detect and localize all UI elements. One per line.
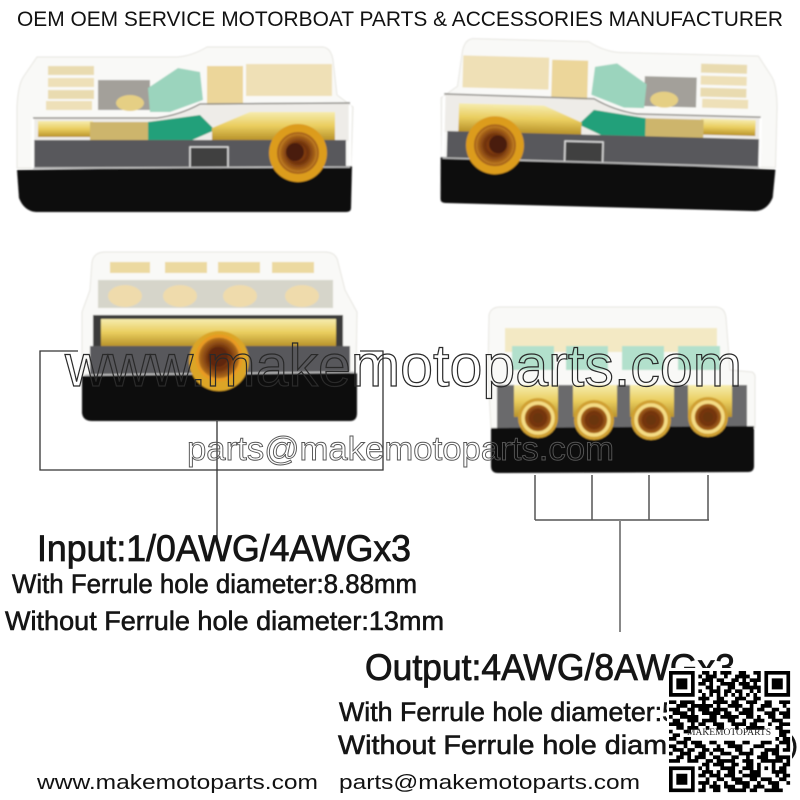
title: OEM OEM SERVICE MOTORBOAT PARTS & ACCESSORIES MANUFACTURER: [17, 7, 783, 31]
QR code: [667, 668, 792, 794]
product photo: fuse block, left-side view: [438, 38, 779, 212]
footer email: parts@makemotoparts.com: [339, 771, 640, 794]
QR centre label: MAKEMOTOPARTS: [687, 728, 771, 738]
output specification: Output:4AWG/8AWGx3: [365, 647, 735, 688]
product photo: output end view: [488, 307, 755, 473]
input bracket lines: [40, 351, 383, 540]
watermark: website outline: www.makemotoparts.com: [64, 333, 742, 399]
input specification: [5, 528, 444, 636]
input specification: Without Ferrule hole diameter:13mm: [5, 606, 444, 636]
input specification: Input:1/0AWG/4AWGx3: [37, 528, 411, 569]
watermark: email outline: parts@makemotoparts.com: [187, 430, 614, 467]
product photo: fuse block, right-side view: [17, 47, 353, 212]
product photo: input end view: [82, 252, 357, 421]
footer website: www.makemotoparts.com: [36, 771, 318, 794]
output specification: [338, 647, 798, 760]
output bracket lines: [535, 475, 709, 632]
input specification: With Ferrule hole diameter:8.88mm: [12, 569, 417, 599]
output specification: With Ferrule hole diameter:5.5mm: [339, 697, 744, 727]
output specification: Without Ferrule hole diameter:8mm): [338, 730, 798, 760]
